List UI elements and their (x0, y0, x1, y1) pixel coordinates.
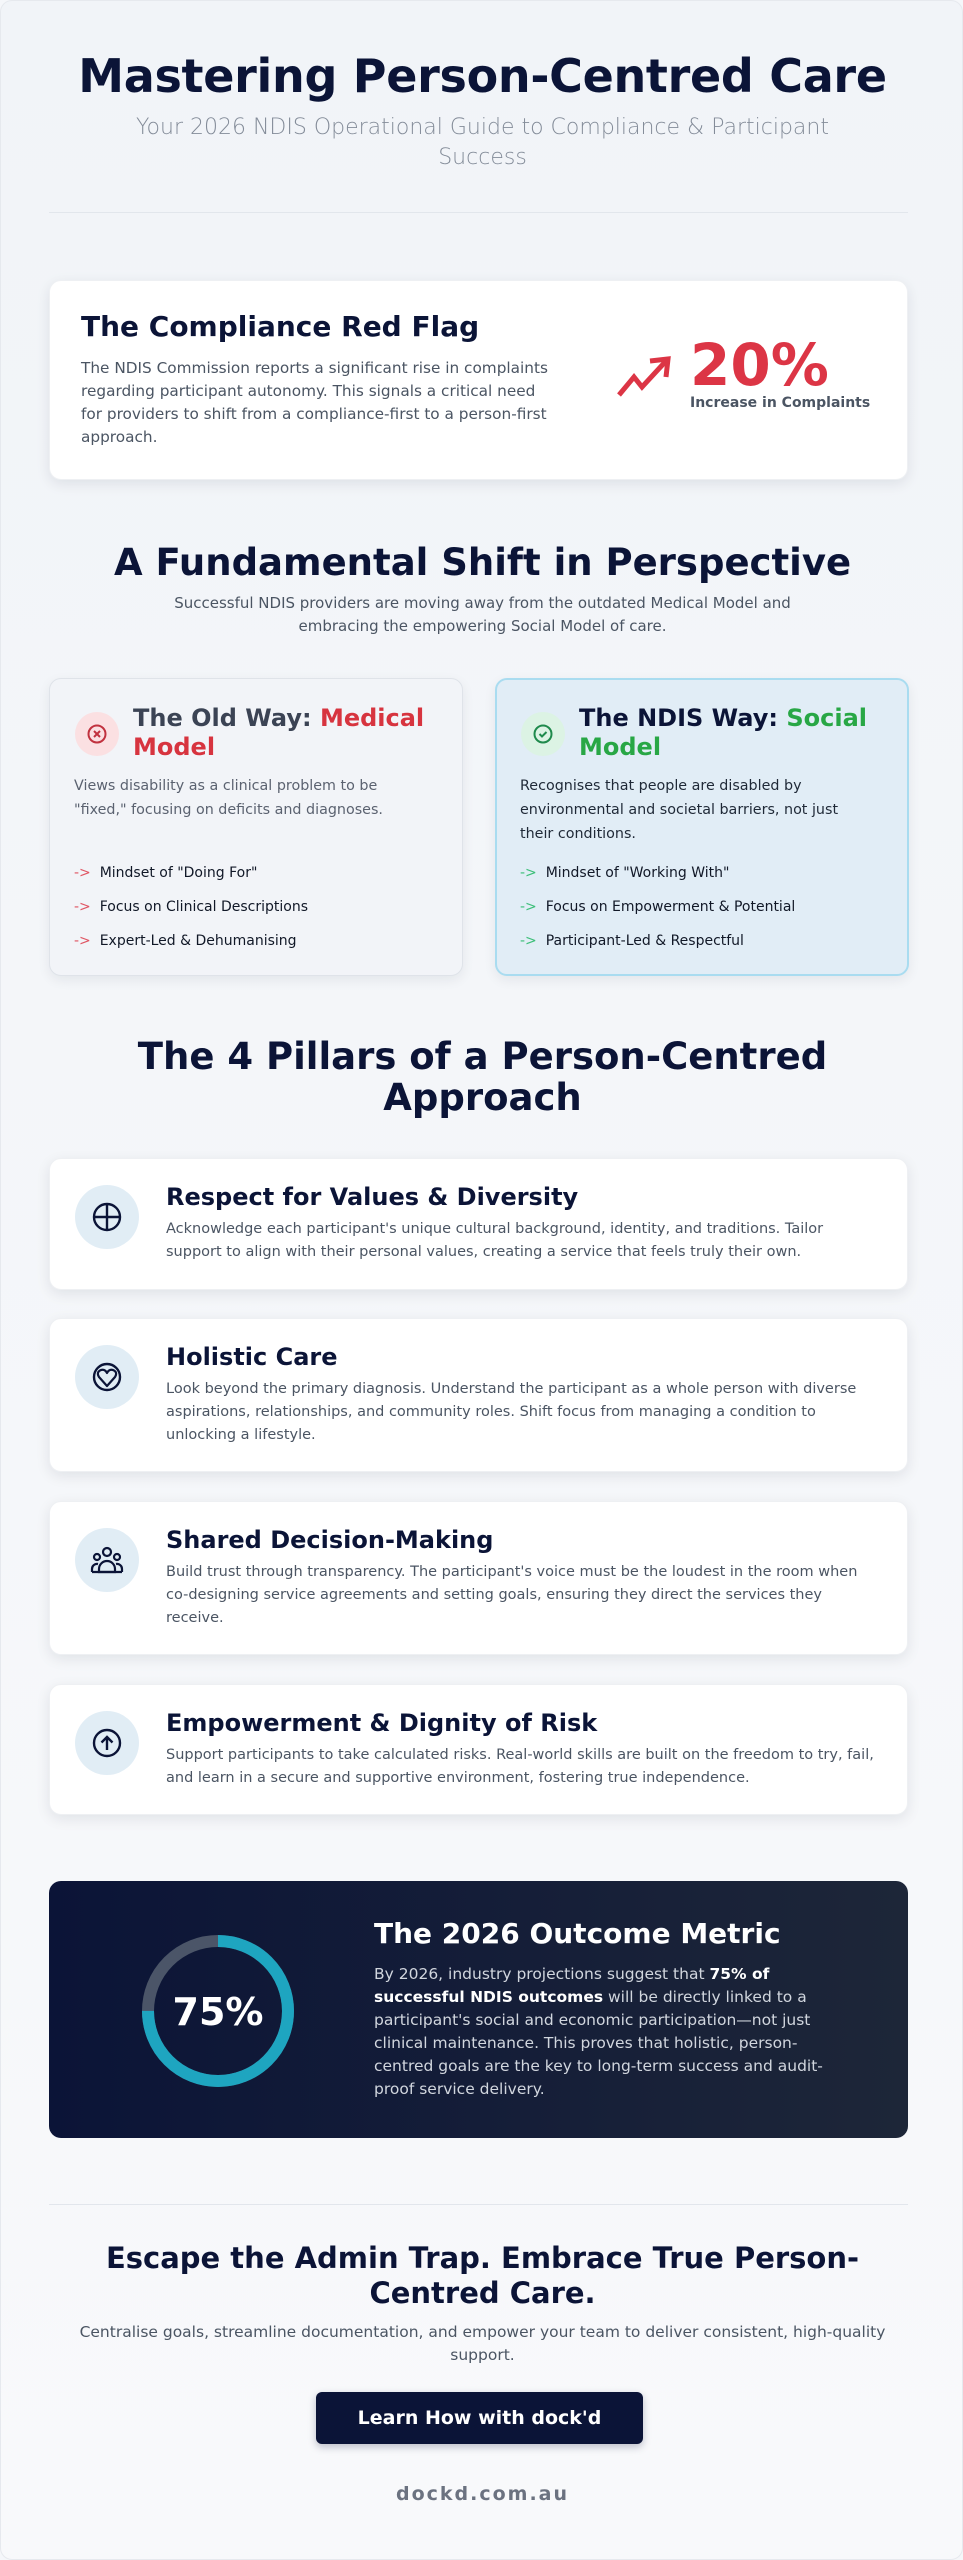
text block: The NDIS Commission reports a significant rise in complaints regarding participant autonomy. This signals a critical need for providers to shift from a compliance-first to a person-first approach. (81, 359, 548, 446)
list (74, 865, 308, 949)
list: -> Participant-Led & Respectful (520, 933, 744, 949)
panel: social model (495, 678, 909, 976)
CTA text: Centralise goals, streamline documentation, and empower your team to deliver consistent, high-quality support. (80, 2323, 885, 2364)
text: Views disability as a clinical problem to be "fixed," focusing on deficits and diagnoses. (74, 778, 383, 818)
list: -> Mindset of "Working With" (520, 865, 729, 881)
icon: globe (75, 1185, 139, 1249)
heading: The NDIS Way: Social Model (579, 704, 867, 761)
list: -> Focus on Clinical Descriptions (74, 899, 308, 915)
pillar: holistic: Look beyond the primary diagnosis. Understand the participant as a whole person with diverse aspirations, relationships, and community roles. Shift focus from managing a condition to unlocking a lifestyle. (166, 1381, 856, 1443)
icon: up arrow circle (75, 1711, 139, 1775)
title: Mastering Person-Centred Care (78, 49, 887, 103)
stat: Increase in Complaints (690, 395, 870, 411)
pillar: holistic (49, 1318, 908, 1472)
icon: trending arrow (617, 356, 671, 397)
icon: people (75, 1528, 139, 1592)
button (316, 2392, 643, 2444)
list (520, 865, 795, 949)
pillar: respect (49, 1158, 908, 1290)
list: -> Focus on Empowerment & Potential (520, 899, 795, 915)
icon: x circle (75, 712, 119, 756)
stat (690, 331, 870, 411)
icon: check circle (521, 712, 565, 756)
pillar: respect: Respect for Values & Diversity (166, 1183, 578, 1211)
pillar: empowerment: Support participants to take calculated risks. Real-world skills are built on the freedom to try, fail, and learn in a secure and supportive environment, fostering true independence. (166, 1747, 874, 1786)
text block: shift intro: Successful NDIS providers are moving away from the outdated Medical Model and embracing the empowering Social Model of care. (174, 594, 791, 635)
heading: fundamental shift: A Fundamental Shift in Perspective (114, 541, 851, 584)
list: -> Expert-Led & Dehumanising (74, 933, 297, 949)
list: -> Mindset of "Doing For" (74, 865, 257, 881)
subtitle: Your 2026 NDIS Operational Guide to Compliance & Participant Success (136, 115, 829, 170)
heading: The Old Way: Medical Model (133, 704, 424, 761)
chart: donut 75%: 75% (173, 1990, 263, 2034)
pillar: empowerment: Empowerment & Dignity of Risk (166, 1709, 597, 1737)
pillar: shared decision-making: Shared Decision-Making (166, 1526, 493, 1554)
panel: outcome metric (49, 1881, 908, 2138)
heading: 4 pillars: The 4 Pillars of a Person-Centred Approach (138, 1035, 827, 1119)
chart: donut 75% (142, 1935, 294, 2087)
heading: The Compliance Red Flag (81, 310, 479, 343)
text: Recognises that people are disabled by environmental and societal barriers, not just their conditions. (520, 778, 838, 842)
panel: medical model (49, 678, 463, 976)
panel: compliance red flag (49, 280, 908, 480)
pillar: shared decision-making (49, 1501, 908, 1655)
button: Learn How with dock'd (358, 2407, 601, 2429)
icon: heart (75, 1345, 139, 1409)
pillar: holistic: Holistic Care (166, 1343, 338, 1371)
stat: 20% (690, 331, 829, 399)
footer url: dockd.com.au (396, 2483, 569, 2505)
heading: The 2026 Outcome Metric (374, 1917, 781, 1950)
pillar: shared decision-making: Build trust through transparency. The participant's voice must be the loudest in the room when co-designing service agreements and setting goals, ensuring they direct the services they receive. (166, 1564, 857, 1626)
pillar: respect: Acknowledge each participant's unique cultural background, identity, and traditions. Tailor support to align with their personal values, creating a service that feels truly their own. (166, 1221, 823, 1260)
text: By 2026, industry projections suggest that 75% of successful NDIS outcomes will be directly linked to a participant's social and economic participation—not just clinical maintenance. This proves that holistic, person-centred goals are the key to long-term success and audit-proof service delivery. (374, 1965, 823, 2098)
CTA heading: Escape the Admin Trap. Embrace True Person-Centred Care. (106, 2241, 859, 2310)
pillar: empowerment (49, 1684, 908, 1815)
